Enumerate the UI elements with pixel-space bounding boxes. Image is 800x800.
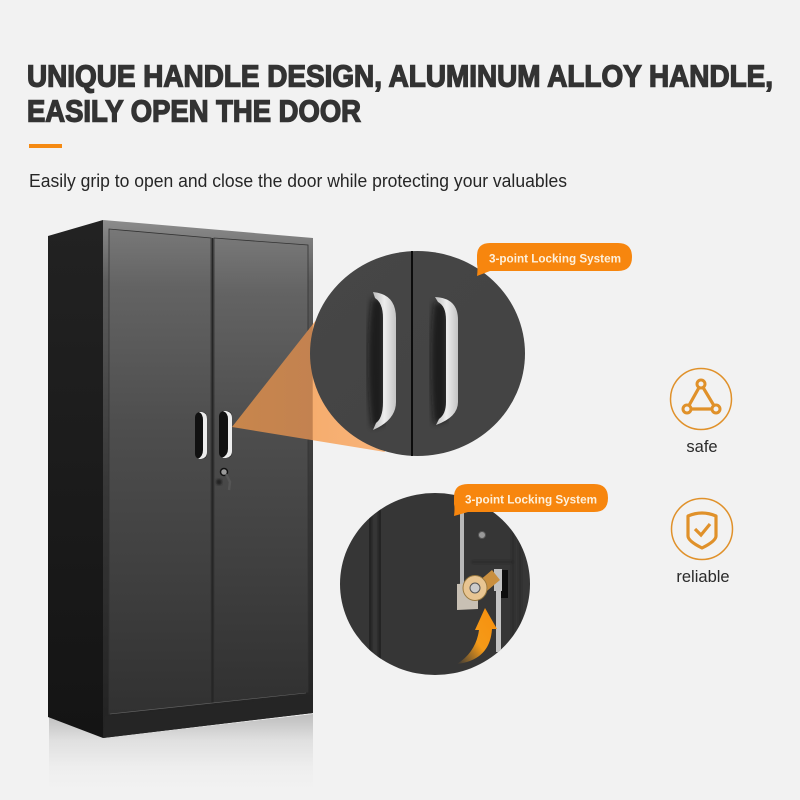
plinth (103, 695, 313, 738)
latch bracket (457, 583, 478, 610)
door seam (212, 238, 214, 703)
latch plate (494, 569, 502, 591)
cabinet (48, 220, 313, 738)
orange accent bar (29, 144, 62, 148)
small right handle (219, 411, 232, 458)
left handle shadow (368, 298, 384, 428)
brass arm (482, 570, 500, 591)
icon: safe triangle (670, 368, 732, 430)
latch dark slot (501, 570, 508, 598)
callout: bottom: 3-point Locking System (465, 492, 597, 506)
subtitle: Easily grip to open and close the door while protecting your valuables (29, 170, 567, 191)
left handle (373, 292, 396, 430)
small left handle (195, 412, 207, 459)
left door (109, 229, 211, 714)
orange zoom cone (232, 296, 385, 452)
label: safe: safe (686, 438, 718, 456)
right door (214, 238, 308, 702)
icon: reliable shield (672, 498, 732, 560)
zoom circle: lock mechanism (340, 493, 530, 675)
zoom circle: door handles (310, 251, 525, 456)
callout: top: 3-point Locking System (489, 252, 621, 266)
panel edge lines (472, 530, 522, 638)
cabinet side (48, 220, 103, 738)
cam bolt (470, 583, 480, 593)
door bottom highlight (110, 693, 306, 714)
door gap (411, 251, 413, 456)
key lock (216, 468, 230, 490)
right handle (435, 297, 458, 425)
brass cam (463, 576, 487, 600)
floor reflection (49, 714, 313, 790)
title (27, 58, 773, 128)
door fold lines (370, 505, 380, 665)
arrow (457, 608, 497, 664)
right handle shadow (431, 302, 447, 424)
callout: top (477, 243, 632, 276)
upper rod (460, 513, 464, 584)
label: reliable: reliable (676, 568, 730, 586)
title: EASILY OPEN THE DOOR (27, 94, 361, 128)
cabinet front frame (103, 220, 313, 738)
lower rod (496, 585, 501, 652)
screw (478, 532, 486, 538)
callout: bottom (454, 484, 608, 516)
